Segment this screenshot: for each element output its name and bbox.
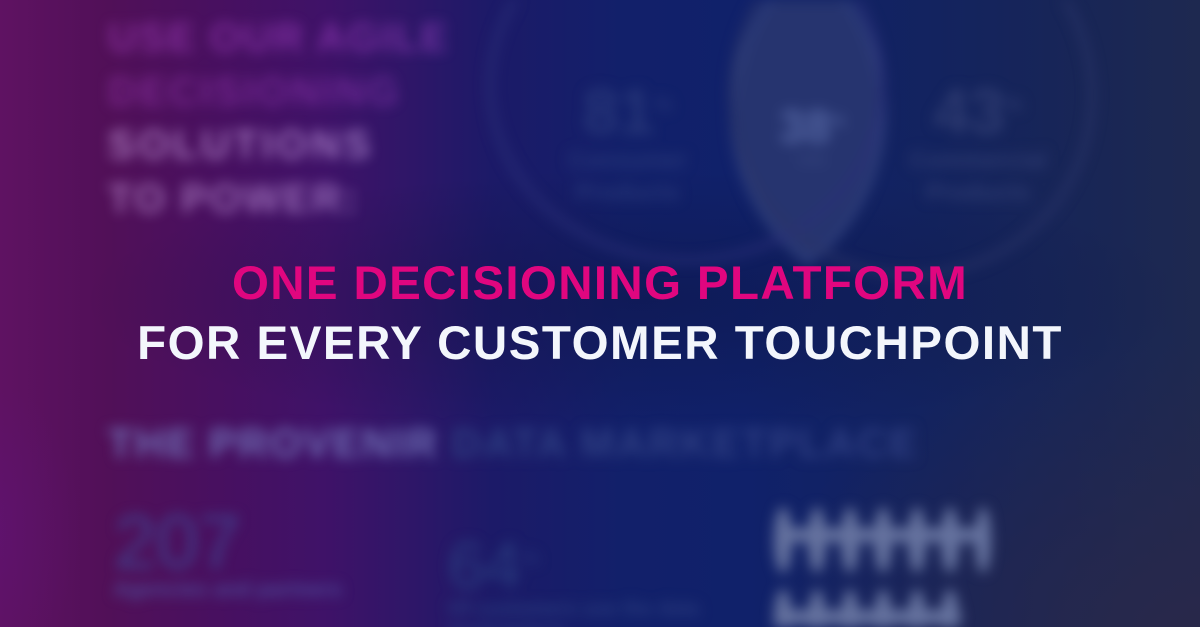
blurred heading: agile decisioning: [104, 16, 449, 220]
blurred stat: 207: 207: [114, 500, 241, 585]
blurred stat: 64%: Of customers use the data: [448, 598, 699, 620]
blurred stat: 207: Agencies and partners: [114, 579, 342, 601]
blurred stat: 43%: Products: [926, 179, 1030, 206]
blurred Venn diagram: [727, 0, 888, 266]
blurred stat: 43%: 43%: [934, 75, 1022, 147]
blurred heading: agile decisioning: SOLUTIONS: [108, 123, 374, 167]
blurred stat: 64%: [448, 528, 699, 627]
blurred stat: 81%: Products: [575, 179, 680, 206]
blurred stat: 64%: 64%: [448, 528, 539, 602]
blurred stat: 81%: 81%: [583, 75, 672, 147]
title: ONE DECISIONING PLATFORM: [232, 257, 968, 310]
blurred stat: 38%: 38%: [779, 100, 845, 152]
blurred people icon grid: [766, 502, 998, 627]
blurred stat: 38%: Use: [798, 151, 826, 168]
blurred heading: provenir data marketplace: THE PROVENIR DATA MARKETPLACE: [108, 420, 919, 466]
blurred heading: agile decisioning: DECISIONING: [108, 70, 401, 114]
title: [137, 257, 1063, 370]
title: FOR EVERY CUSTOMER TOUCHPOINT: [137, 317, 1063, 370]
blurred heading: agile decisioning: TO POWER:: [108, 176, 359, 220]
blurred stat: 43%: Commercial: [909, 147, 1047, 174]
blurred heading: agile decisioning: USE OUR AGILE: [108, 16, 449, 60]
blurred stat: 81%: Consumer: [568, 147, 687, 174]
blurred stat: 43%: [909, 75, 1047, 206]
blurred stat: 81%: [568, 75, 687, 206]
blurred stat: 207: [113, 500, 342, 602]
